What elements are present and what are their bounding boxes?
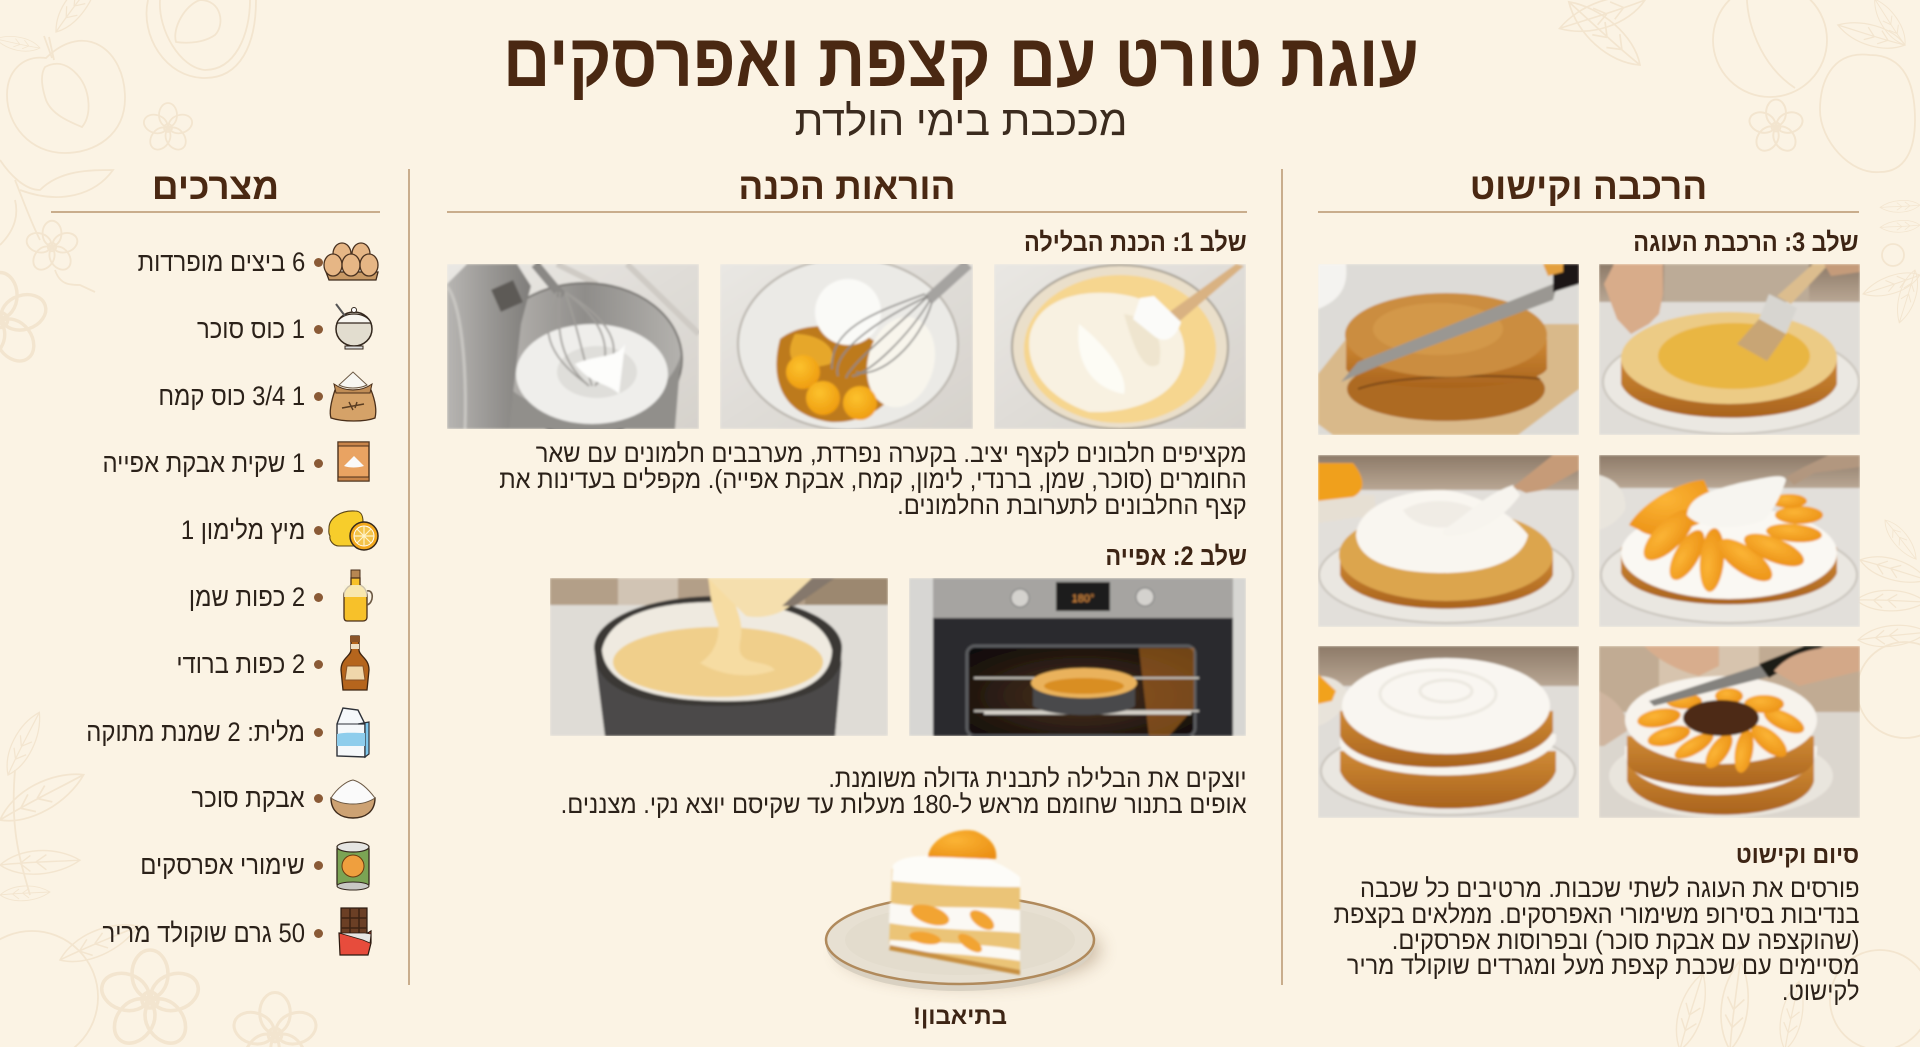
ingredient: dark chocolate bbox=[102, 907, 372, 956]
step 1 description bbox=[500, 440, 1247, 520]
photo: arranging peach slices on cream bbox=[1599, 455, 1860, 627]
ingredient: brandy: 2 כפות ברודי bbox=[176, 649, 305, 679]
heading: ingredients: מצרכים bbox=[152, 166, 279, 207]
finishing description: מסיימים עם שכבת קצפת מעל ומגרדים שוקולד מריר bbox=[1347, 952, 1860, 980]
ingredient: cream carton bbox=[86, 707, 370, 758]
step 1 description: החומרים (סוכר, שמן, ברנדי, לימון, קמח, אבקת אפייה). מקפלים בעדינות את bbox=[500, 466, 1247, 494]
image: slice of peach cream cake on plate bbox=[824, 828, 1108, 994]
heading: preparation: הוראות הכנה bbox=[738, 166, 956, 207]
photo: spreading whipped cream over the layer bbox=[1318, 455, 1824, 627]
photo: grating chocolate on the finished cake bbox=[1599, 646, 1860, 818]
step 2 heading: שלב 2: אפייה bbox=[1105, 541, 1247, 571]
ingredient: oil: 2 כפות שמן bbox=[189, 582, 305, 612]
photo: cake baking in oven at 180 degrees: 180° bbox=[1072, 593, 1094, 605]
ingredient: baking powder: 1 שקית אבקת אפייה bbox=[102, 448, 305, 478]
ingredient: eggs bbox=[137, 242, 379, 936]
heading: assembly and decoration: הרכבה וקישוט bbox=[1470, 166, 1707, 207]
step 1 heading: שלב 1: הכנת הבלילה bbox=[1024, 227, 1247, 257]
ingredient: flour: 1 3/4 כוס קמח bbox=[158, 381, 305, 411]
step 2 description: יוצקים את הבלילה לתבנית גדולה משומנת. bbox=[829, 765, 1247, 793]
ingredient: powdered sugar bbox=[192, 780, 376, 819]
photo: cake baking in oven at 180 degrees bbox=[909, 578, 1246, 736]
photo: mixing yolks, sugar and flour in glass bowl bbox=[720, 264, 973, 429]
ingredient: eggs: 6 ביצים מופרדות bbox=[137, 247, 305, 277]
panel: ingredients list bbox=[86, 242, 379, 956]
photo: fully frosted two-layer cake bbox=[1318, 646, 1579, 818]
step 1 description: קצף החלבונים לתערובת החלמונים. bbox=[897, 492, 1247, 520]
ingredient: powdered sugar: אבקת סוכר bbox=[192, 783, 305, 813]
photo: slicing the cake with a knife bbox=[1318, 264, 1814, 435]
photo: whipping egg whites in stand mixer bbox=[447, 264, 699, 429]
ingredient: brandy bbox=[176, 635, 370, 691]
finishing description: בנדיבות בסירופ משימורי האפרסקים. ממלאים בקצפת bbox=[1334, 901, 1860, 929]
step 1 description: מקציפים חלבונים לקצף יציב. בקערה נפרדת, מערבבים חלמונים עם שאר bbox=[536, 440, 1247, 468]
subtitle: מככבת בימי הולדת bbox=[795, 97, 1127, 144]
finishing heading: סיום וקישוט bbox=[1736, 842, 1859, 869]
step 2 description bbox=[561, 765, 1247, 819]
sign-off text: בתיאבון! bbox=[913, 1003, 1007, 1030]
ingredient: flour bbox=[158, 372, 376, 422]
ingredient: lemon: מיץ מלימון 1 bbox=[181, 515, 305, 545]
ingredient: sugar bbox=[197, 303, 373, 350]
photo: folding egg whites into batter bbox=[994, 264, 1246, 429]
title: עוגת טורט עם קצפת ואפרסקים bbox=[503, 18, 1419, 102]
ingredient: canned peaches bbox=[141, 841, 370, 890]
step 2 description: אופים בתנור שחומם מראש ל-180 מעלות עד שקיסם יוצא נקי. מצננים. bbox=[561, 791, 1247, 819]
finishing description: (שהוקצפה עם אבקת סוכר) ובפרוסות אפרסקים. bbox=[1392, 927, 1860, 955]
photo: pouring batter into pan bbox=[550, 578, 888, 736]
ingredient: cream carton: מלית: 2 שמנת מתוקה bbox=[86, 717, 305, 747]
photo: brushing the cake layer with syrup bbox=[1599, 264, 1860, 435]
ingredient: dark chocolate: 50 גרם שוקולד מריר bbox=[102, 918, 305, 948]
ingredient: sugar: 1 כוס סוכר bbox=[197, 314, 305, 344]
finishing description: פורסים את העוגה לשתי שכבות. מרטיבים כל שכבה bbox=[1360, 875, 1860, 903]
ingredient: baking powder bbox=[102, 441, 370, 482]
ingredient: lemon bbox=[181, 510, 379, 551]
finishing description bbox=[1334, 875, 1860, 1006]
finishing description: לקישוט. bbox=[1782, 978, 1860, 1006]
ingredient: canned peaches: שימורי אפרסקים bbox=[141, 850, 305, 880]
step 3 heading: שלב 3: הרכבת העוגה bbox=[1634, 227, 1859, 257]
ingredient: oil bbox=[189, 570, 374, 622]
